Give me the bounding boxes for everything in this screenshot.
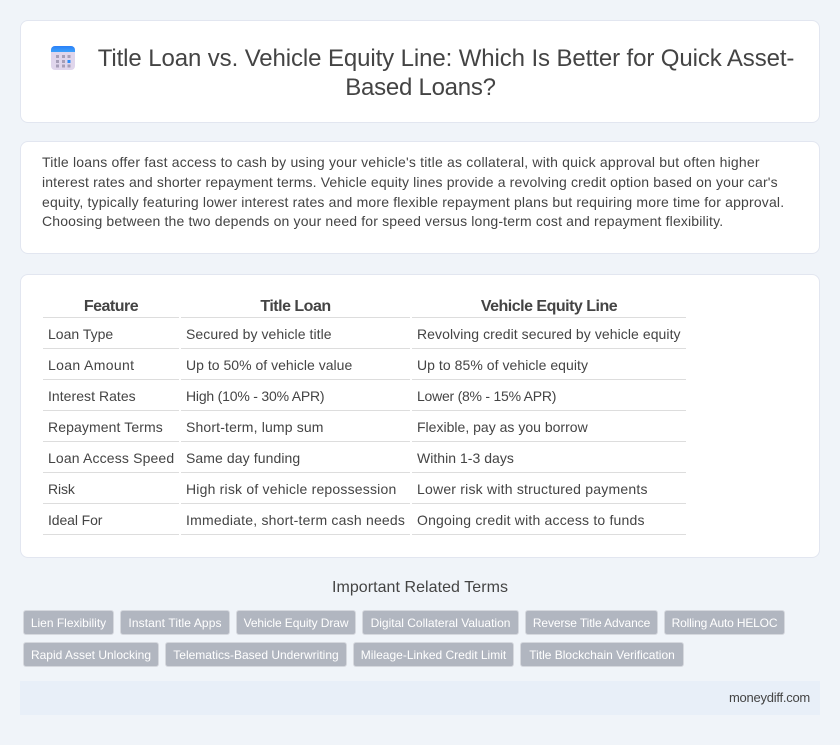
panel: description [20, 141, 820, 254]
panel: comparison table: Within 1-3 days [417, 450, 514, 466]
panel: comparison table: Up to 50% of vehicle value [186, 357, 352, 373]
panel: comparison table: Same day funding [186, 450, 300, 466]
tag [353, 642, 514, 667]
header: Title Loan: Title Loan [260, 298, 331, 315]
row: Repayment Terms: Repayment Terms [48, 419, 163, 435]
footer bar [20, 681, 820, 715]
tag [165, 642, 347, 667]
header: Feature: Feature [84, 298, 138, 315]
tag [23, 642, 159, 667]
tag: Rolling Auto HELOC [672, 616, 777, 630]
row: Loan Amount: Loan Amount [48, 357, 134, 373]
title: Based Loans? [345, 74, 496, 101]
panel: comparison table: Lower (8% - 15% APR) [417, 388, 556, 404]
tag: Title Blockchain Verification [529, 648, 675, 662]
panel: comparison table: Secured by vehicle title [186, 326, 332, 342]
row: Loan Access Speed: Loan Access Speed [48, 450, 174, 466]
tag [23, 610, 114, 635]
row: Loan Type: Loan Type [48, 326, 113, 342]
panel: comparison table: Immediate, short-term cash needs [186, 512, 405, 528]
panel: header [20, 20, 820, 123]
tag [520, 642, 684, 667]
panel: comparison table: Up to 85% of vehicle equity [417, 357, 588, 373]
icon: calendar [51, 46, 75, 70]
panel: comparison table [20, 274, 820, 558]
row: Ideal For: Ideal For [48, 512, 102, 528]
tag: Mileage-Linked Credit Limit [361, 648, 506, 662]
footer: source: moneydiff.com [729, 690, 810, 705]
tag: Instant Title Apps [128, 616, 222, 630]
panel: comparison table: Ongoing credit with access to funds [417, 512, 645, 528]
tag [525, 610, 658, 635]
row: Risk: Risk [48, 481, 75, 497]
text: description [42, 154, 784, 229]
text: description: Title loans offer fast access to cash by using your vehicle's title as collateral, with quick approval but often higher [42, 154, 760, 170]
panel: comparison table: Revolving credit secured by vehicle equity [417, 326, 681, 342]
tag: Reverse Title Advance [533, 616, 650, 630]
text: description: interest rates and shorter repayment terms. Vehicle equity lines provide a revolving credit option based on your car's [42, 174, 778, 190]
title [98, 45, 794, 101]
heading: related terms: Important Related Terms [332, 579, 508, 596]
tag group: related terms [23, 610, 785, 667]
panel: comparison table: Flexible, pay as you borrow [417, 419, 588, 435]
text: description: Choosing between the two depends on your need for speed versus long-term cost and repayment flexibility. [42, 213, 723, 229]
panel: comparison table: Short-term, lump sum [186, 419, 324, 435]
panel: comparison table: High (10% - 30% APR) [186, 388, 324, 404]
text: description: equity, typically featuring lower interest rates and more flexible repayment plans but requiring more time for approval. [42, 194, 784, 210]
tag: Telematics-Based Underwriting [173, 648, 339, 662]
tag [664, 610, 785, 635]
tag: Digital Collateral Valuation [371, 616, 510, 630]
row: Interest Rates: Interest Rates [48, 388, 136, 404]
tag: Lien Flexibility [31, 616, 106, 630]
panel: comparison table: High risk of vehicle repossession [186, 481, 396, 497]
tag [120, 610, 230, 635]
tag [362, 610, 519, 635]
title: Title Loan vs. Vehicle Equity Line: Which Is Better for Quick Asset- [98, 45, 794, 72]
tag: Rapid Asset Unlocking [31, 648, 151, 662]
panel: comparison table: Lower risk with structured payments [417, 481, 648, 497]
tag [236, 610, 356, 635]
tag: Vehicle Equity Draw [244, 616, 348, 630]
header: Vehicle Equity Line: Vehicle Equity Line [481, 298, 617, 315]
